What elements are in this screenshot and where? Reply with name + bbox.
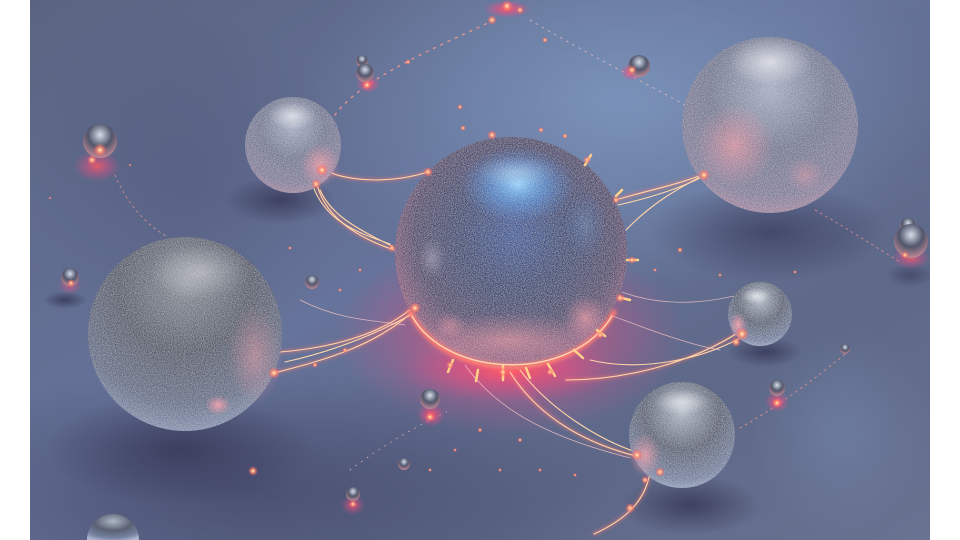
fibre connections — [115, 20, 900, 534]
tiny sphere: bottom left edge — [87, 514, 139, 540]
fibre strands — [274, 168, 742, 534]
large sphere: bottom left — [88, 237, 283, 431]
sphere shadows — [43, 176, 934, 535]
tiny sphere: bottom — [341, 487, 365, 515]
tiny sphere: near centre left — [305, 275, 319, 289]
fibre glow — [274, 168, 742, 534]
tiny sphere: upper right — [620, 55, 650, 81]
tiny sphere: bottom centre — [398, 458, 410, 470]
tiny sphere: lower right — [765, 380, 789, 412]
faint strands and dotted links — [115, 20, 900, 470]
small sphere: right — [728, 282, 792, 346]
medium sphere: bottom right — [629, 382, 735, 488]
tiny sphere: left — [60, 268, 80, 294]
glowing rim of central sphere — [410, 155, 638, 381]
tiny sphere: upper left — [75, 124, 119, 180]
central sphere — [395, 137, 627, 369]
central red glow — [350, 271, 671, 428]
large sphere: top right — [682, 37, 858, 213]
medium sphere: top left — [245, 97, 341, 193]
glow node at top — [484, 0, 529, 18]
tiny sphere: right — [840, 344, 850, 354]
tiny sphere: upper centre — [356, 55, 380, 93]
tiny sphere: far right — [892, 218, 930, 269]
tiny sphere: below centre — [417, 389, 445, 427]
